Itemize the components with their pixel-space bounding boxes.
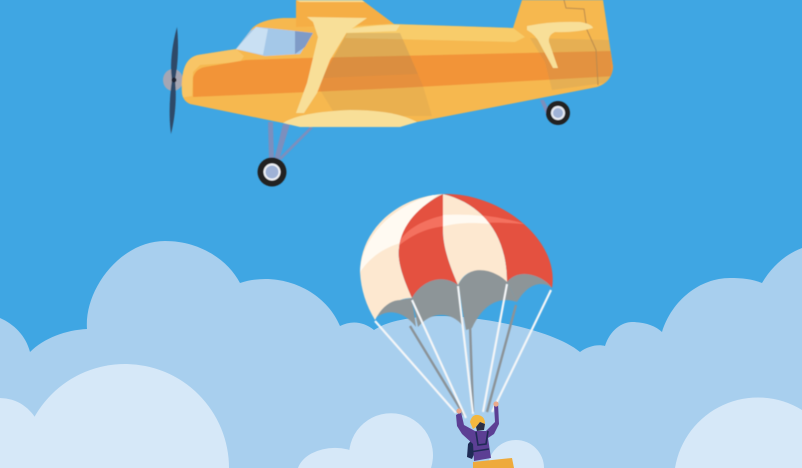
harness — [470, 431, 489, 452]
plane — [163, 0, 616, 186]
front clouds — [0, 364, 802, 468]
helmet — [470, 415, 485, 429]
hands — [456, 408, 462, 414]
body — [456, 403, 499, 461]
backpack — [467, 436, 481, 459]
tail wheel — [540, 100, 570, 125]
back clouds — [0, 241, 802, 468]
wing shadow — [322, 33, 418, 78]
propeller — [163, 27, 183, 134]
orange band — [193, 51, 616, 97]
suspension lines grey — [410, 305, 516, 415]
parachute — [360, 194, 553, 415]
white suspension lines — [375, 284, 551, 418]
fuselage — [180, 0, 616, 123]
tail plane — [527, 22, 593, 68]
canopy grey underside — [377, 269, 552, 330]
cargo box — [473, 458, 514, 468]
canopy panels — [360, 194, 553, 320]
cockpit window — [236, 27, 313, 56]
wing and strut — [283, 17, 417, 127]
parachutist — [456, 401, 514, 468]
landing gear — [258, 122, 313, 186]
tail rudder lines — [564, 0, 598, 85]
